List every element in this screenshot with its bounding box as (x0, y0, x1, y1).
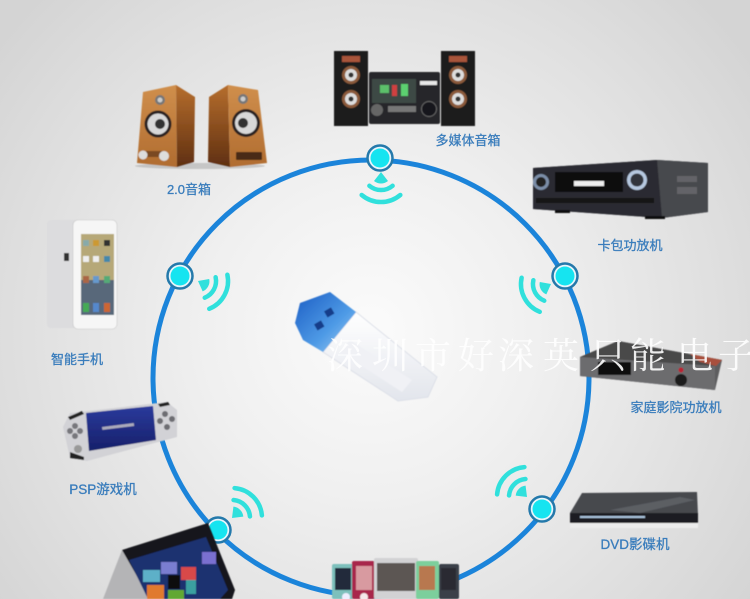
node: lower left (206, 518, 230, 542)
device: multimedia speaker system (334, 51, 475, 126)
watermark: 深圳市好深英只能电子 (327, 336, 750, 376)
node: top (368, 146, 392, 170)
icon: signal lower right (492, 462, 541, 511)
label: 2.0 speakers: 2.0音箱 (167, 182, 211, 197)
node: upper right (552, 264, 578, 288)
device: home theatre amplifier (580, 341, 722, 390)
label: smartphone: 智能手机 (51, 352, 103, 367)
device: smartphone (47, 220, 117, 329)
label: card amplifier: 卡包功放机 (597, 238, 663, 253)
device: DVD player (570, 492, 698, 528)
label: PSP console: PSP游戏机 (69, 482, 137, 497)
device: 2.0 speakers (135, 85, 267, 169)
device: Bluetooth USB dongle (295, 292, 437, 401)
device: MP3 players (332, 558, 459, 599)
label: home theatre amplifier: 家庭影院功放机 (630, 400, 722, 415)
label: DVD player: DVD影碟机 (600, 537, 670, 552)
icon: signal lower left (218, 483, 267, 532)
device: tablet laptop (103, 523, 235, 599)
icon: signal upper right (515, 267, 560, 315)
device: PSP console (63, 402, 177, 461)
device: card amplifier (533, 160, 708, 219)
icon: signal top (362, 172, 400, 202)
icon: signal upper left (189, 264, 234, 312)
node: upper left (168, 264, 192, 288)
connection ring (153, 160, 589, 596)
node: lower right (530, 496, 554, 522)
label: multimedia speakers: 多媒体音箱 (435, 133, 501, 148)
